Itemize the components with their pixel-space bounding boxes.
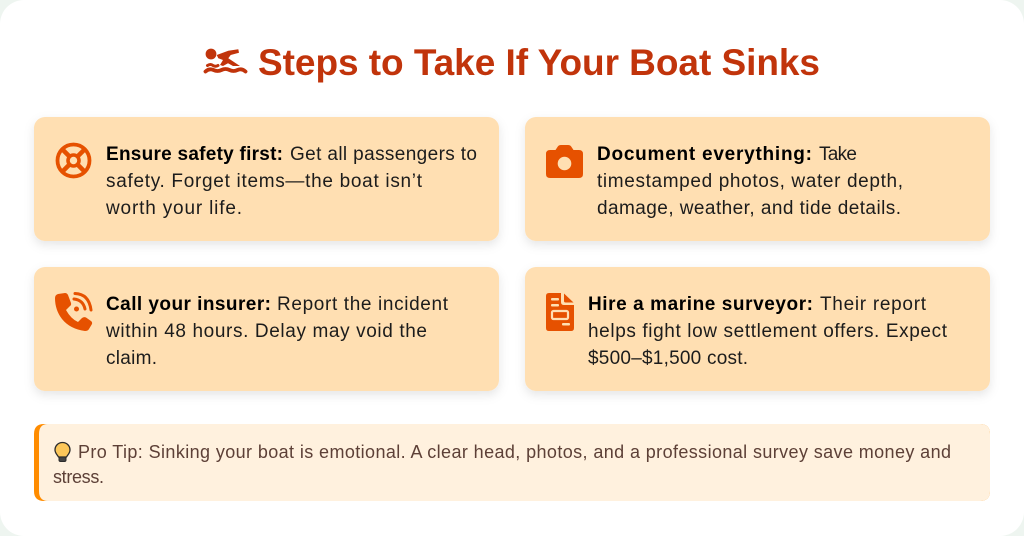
text: call your insurer: Report the incident — [277, 294, 449, 315]
text: document everything: damage, weather, and tide details. — [597, 198, 901, 219]
text: ensure safety first: safety. Forget items—the boat isn’t — [106, 171, 423, 192]
icon: lifebuoy — [58, 144, 90, 176]
text: call your insurer — [105, 294, 449, 369]
text: call your insurer: Call your insurer: — [106, 294, 271, 315]
icon: light bulb — [55, 442, 70, 462]
text: ensure safety first: worth your life. — [105, 198, 242, 219]
text: document everything: Document everything: — [597, 144, 812, 165]
panel: call your insurer — [34, 267, 499, 391]
text: hire a marine surveyor: Their report — [820, 294, 927, 315]
text: document everything — [597, 144, 903, 219]
icon: swimmer — [206, 49, 246, 72]
callout: pro tip — [34, 424, 990, 501]
text: ensure safety first: Get all passengers to — [290, 144, 477, 165]
icon: document — [546, 293, 574, 331]
text: hire a marine surveyor: helps fight low settlement offers. Expect — [588, 321, 948, 342]
icon: phone with signal — [55, 293, 92, 331]
text: ensure safety first: Ensure safety first: — [106, 144, 283, 165]
text: call your insurer: within 48 hours. Delay may void the — [105, 321, 427, 342]
icon: camera — [546, 145, 583, 178]
panel: ensure safety first — [34, 117, 499, 241]
title: Steps to Take If Your Boat Sinks — [258, 42, 820, 83]
text: ensure safety first — [105, 144, 477, 219]
text: pro tip: Pro Tip: Sinking your boat is emotional. A clear head, photos, and a professional survey save money and — [78, 442, 951, 462]
text: hire a marine surveyor: $500–$1,500 cost. — [588, 348, 748, 369]
text: document everything: Take — [819, 144, 857, 165]
text: pro tip — [53, 442, 951, 487]
panel: document everything — [525, 117, 990, 241]
text: pro tip: stress. — [53, 467, 104, 487]
text: hire a marine surveyor: Hire a marine surveyor: — [588, 294, 813, 315]
text: document everything: timestamped photos, water depth, — [597, 171, 903, 192]
text: call your insurer: claim. — [106, 348, 157, 369]
panel: hire a marine surveyor — [525, 267, 990, 391]
text: hire a marine surveyor — [588, 294, 948, 369]
